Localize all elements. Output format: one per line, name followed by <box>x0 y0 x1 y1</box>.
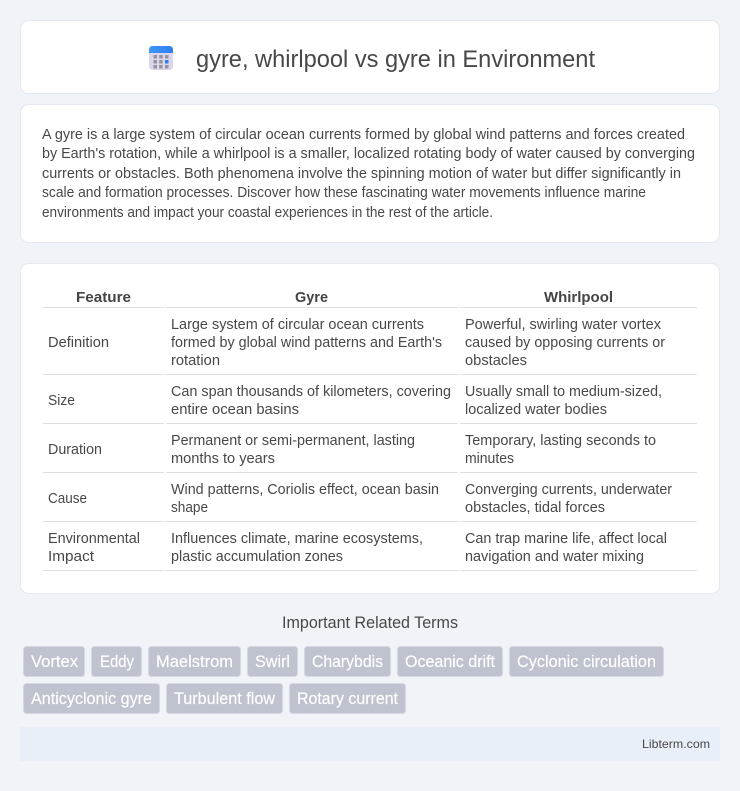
row: duration: Duration <box>48 442 102 458</box>
row: definition: obstacles <box>465 353 527 369</box>
table header row: Gyre <box>295 289 328 306</box>
row: size <box>48 384 662 418</box>
related term tags: Maelstrom <box>156 653 233 671</box>
table header row <box>76 289 613 306</box>
row: environmental impact: Environmental <box>48 531 140 547</box>
row: environmental impact: navigation and water mixing <box>465 549 644 565</box>
panel: header <box>20 20 720 94</box>
row: definition: formed by global wind patterns and Earth's <box>171 335 442 351</box>
row: definition: Large system of circular ocean currents <box>171 317 424 333</box>
row: duration: minutes <box>465 451 514 467</box>
intro text: scale and formation processes. Discover how these fascinating water movements influence marine <box>42 185 646 201</box>
row: definition: caused by opposing currents or <box>465 335 665 351</box>
related term tags: Swirl <box>255 653 290 671</box>
row: cause: shape <box>171 500 208 516</box>
row: definition: Powerful, swirling water vortex <box>465 317 662 333</box>
title: gyre, whirlpool vs gyre in Environment <box>196 46 595 73</box>
row: size: localized water bodies <box>465 402 607 418</box>
row: cause <box>48 482 672 516</box>
row: cause: obstacles, tidal forces <box>465 500 605 516</box>
panel: intro paragraph <box>20 104 720 242</box>
intro text: A gyre is a large system of circular ocean currents formed by global wind patterns and forces created <box>42 127 685 143</box>
related term tags <box>24 646 664 714</box>
intro text <box>42 127 695 221</box>
footer credit: Libterm.com <box>642 737 710 751</box>
footer bar <box>20 727 720 761</box>
related term tags: Oceanic drift <box>405 653 495 671</box>
icon: calendar grid <box>149 46 173 70</box>
row: definition: Definition <box>48 335 109 351</box>
row: environmental impact: Impact <box>48 549 94 565</box>
row: environmental impact: Influences climate, marine ecosystems, <box>171 531 423 547</box>
row: duration: Permanent or semi-permanent, lasting <box>171 433 415 449</box>
related term tags: Eddy <box>100 653 135 671</box>
row: cause: Cause <box>48 491 87 507</box>
row: environmental impact: plastic accumulation zones <box>171 549 343 565</box>
row: duration: Temporary, lasting seconds to <box>465 433 656 449</box>
row: cause: Converging currents, underwater <box>465 482 672 498</box>
row: definition <box>48 317 665 369</box>
heading: related terms: Important Related Terms <box>282 614 458 632</box>
related term tags: Charybdis <box>312 653 383 671</box>
row: size: Usually small to medium-sized, <box>465 384 662 400</box>
panel: comparison table <box>20 264 720 594</box>
related term tags: Vortex <box>31 653 79 671</box>
row: duration <box>48 433 656 467</box>
row: size: Can span thousands of kilometers, covering <box>171 384 451 400</box>
row: size: Size <box>48 393 75 409</box>
intro text: environments and impact your coastal experiences in the rest of the article. <box>42 205 493 221</box>
intro text: currents or obstacles. Both phenomena involve the spinning motion of water but differ significantly in <box>42 166 681 182</box>
row: environmental impact <box>48 531 667 565</box>
row: definition: rotation <box>171 353 220 369</box>
related term tags: Turbulent flow <box>174 690 275 708</box>
row: size: entire ocean basins <box>171 402 299 418</box>
intro text: by Earth's rotation, while a whirlpool is a smaller, localized rotating body of water caused by converging <box>42 146 695 162</box>
row: environmental impact: Can trap marine life, affect local <box>465 531 667 547</box>
related term tags: Rotary current <box>297 690 398 708</box>
table header row: Feature <box>76 289 131 306</box>
row: cause: Wind patterns, Coriolis effect, ocean basin <box>171 482 439 498</box>
table header row: Whirlpool <box>544 289 613 306</box>
related term tags: Anticyclonic gyre <box>31 690 152 708</box>
row: duration: months to years <box>171 451 275 467</box>
related term tags: Cyclonic circulation <box>517 653 656 671</box>
